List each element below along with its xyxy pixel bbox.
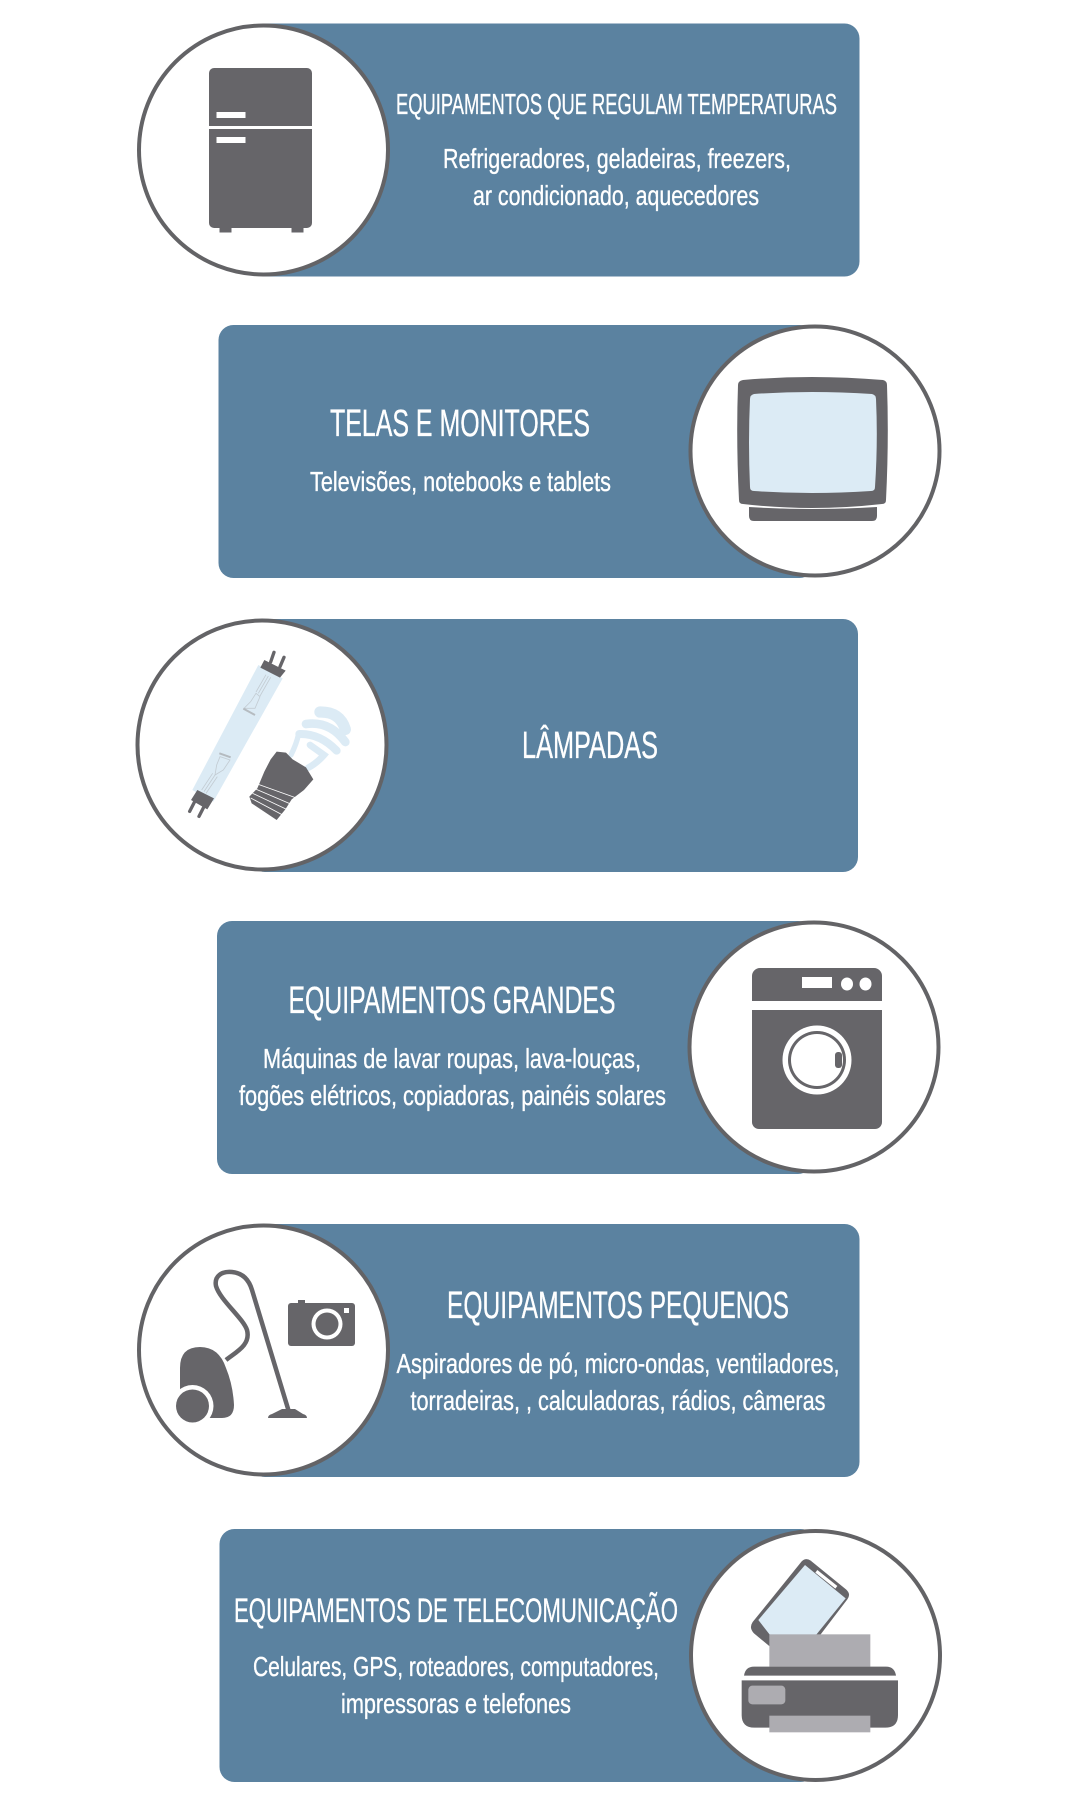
icon: camera — [288, 1300, 355, 1346]
icon: fluorescent tube — [190, 652, 286, 816]
description line 2: ar condicionado, aquecedores — [473, 180, 759, 211]
printer — [742, 1634, 898, 1732]
icon: vacuum cleaner — [172, 1272, 307, 1427]
heading: EQUIPAMENTOS QUE REGULAM TEMPERATURAS — [396, 89, 837, 121]
panel: equipamentos grandes — [217, 921, 938, 1174]
description line 2: fogões elétricos, copiadoras, painéis solares — [239, 1080, 666, 1111]
icon: smartphone and printer — [742, 1559, 898, 1732]
icon: refrigerator — [209, 68, 312, 232]
icon: compact fluorescent bulb — [249, 712, 345, 820]
smartphone — [751, 1559, 849, 1647]
heading: LÂMPADAS — [522, 724, 658, 767]
description line 1: Máquinas de lavar roupas, lava-louças, — [263, 1043, 641, 1074]
panel background — [250, 24, 860, 276]
circle badge — [138, 620, 386, 870]
description: Televisões, notebooks e tablets — [310, 466, 611, 497]
circle badge — [690, 922, 938, 1172]
description line 1: Aspiradores de pó, micro-ondas, ventiladores, — [396, 1348, 840, 1379]
heading: EQUIPAMENTOS PEQUENOS — [447, 1285, 789, 1327]
circle badge — [691, 1531, 940, 1780]
panel background — [250, 619, 858, 872]
panel background — [218, 325, 814, 578]
heading: EQUIPAMENTOS GRANDES — [288, 980, 616, 1022]
description line 2: torradeiras, , calculadoras, rádios, câmeras — [410, 1385, 826, 1416]
description line 1: Refrigeradores, geladeiras, freezers, — [443, 143, 791, 174]
panel: telas e monitores — [218, 325, 940, 578]
icon: television — [737, 377, 888, 521]
panel: equipamentos que regulam temperaturas — [139, 24, 860, 276]
circle badge — [139, 1226, 388, 1474]
panel background — [250, 1224, 860, 1477]
panel: lâmpadas — [138, 619, 858, 872]
panel: equipamentos pequenos — [139, 1224, 860, 1477]
panel: equipamentos de telecomunicação — [220, 1529, 940, 1782]
description line 1: Celulares, GPS, roteadores, computadores, — [253, 1651, 659, 1682]
description line 2: impressoras e telefones — [341, 1688, 571, 1719]
panel background — [220, 1529, 816, 1782]
heading: TELAS E MONITORES — [330, 403, 590, 445]
heading: EQUIPAMENTOS DE TELECOMUNICAÇÃO — [234, 1592, 678, 1630]
circle badge — [690, 326, 940, 576]
panel background — [217, 921, 813, 1174]
icon: washing machine — [752, 968, 882, 1129]
circle badge — [139, 26, 388, 274]
